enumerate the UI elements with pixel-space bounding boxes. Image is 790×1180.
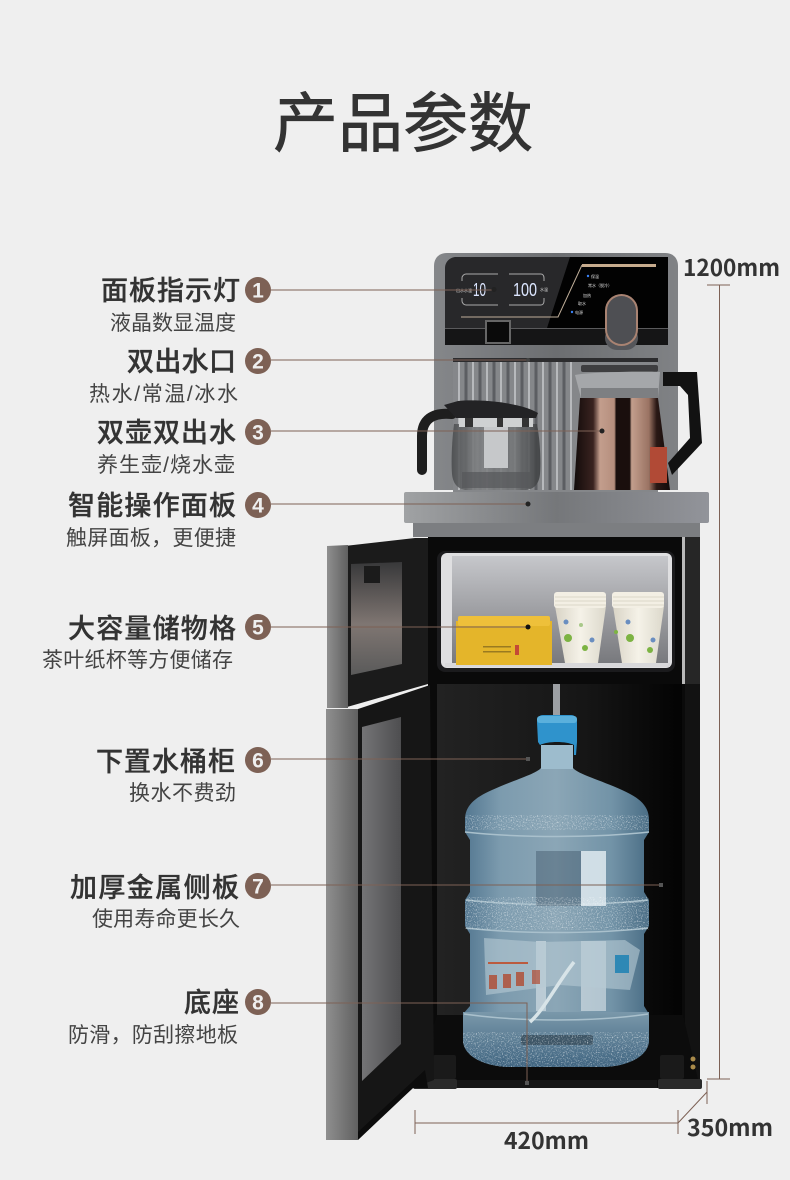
touch labels: 电源 [575,309,583,315]
callout 2 [89,347,271,406]
callout 4: 触屏面板，更便捷 [66,527,236,550]
temperature display left: 出水水温 [456,287,472,293]
temperature display left: 10 [473,280,486,300]
temperature display right [509,274,548,305]
callout 6: 下置水桶柜 [96,747,235,777]
callout lines with dots [271,287,663,1085]
rib recess [453,358,658,492]
yellow tea box [456,616,552,665]
right paper cups [612,592,664,663]
callout 7: 加厚金属侧板 [70,873,239,903]
callout 6: 换水不费劲 [129,782,236,805]
bottle glitter texture [463,800,649,1070]
dimension: depth 350mm [678,1081,773,1143]
callout 3: 3 [252,422,264,444]
storage compartment [437,551,675,672]
water bottle [463,684,649,1070]
callout 4: 4 [252,494,264,518]
callout 7 [70,873,271,931]
callout 4: 智能操作面板 [68,491,236,521]
touch labels: 加热 [583,292,591,298]
temperature display right: 100 [513,280,537,300]
temperature display left [456,274,498,305]
callout 8: 防滑，防刮擦地板 [68,1024,238,1047]
callout 8: 底座 [184,988,239,1018]
countertop [404,492,709,537]
bottle cap [537,715,577,755]
callout 8 [68,988,271,1047]
upper door open [327,538,428,708]
left paper cups [554,592,606,663]
callout 8: 8 [252,992,264,1014]
control panel [445,257,668,350]
callout 5: 大容量储物格 [68,614,236,644]
callout 5: 5 [252,616,264,640]
callout 6: 6 [252,750,264,772]
dimension: width 420mm: 420mm [504,1122,589,1156]
callout 5: 茶叶纸杯等方便储存 [42,649,233,672]
knob button [605,294,638,350]
callout 1 [101,276,271,335]
water nozzle [485,320,511,344]
callout 7: 7 [252,876,264,898]
temperature display right: 水温 [540,286,548,292]
callout 2: 2 [252,350,264,374]
kettle right [574,365,702,490]
callout 1: 液晶数显温度 [110,312,236,335]
callout 3: 养生壶/烧水壶 [97,454,235,477]
callout 2: 热水/常温/冰水 [89,383,238,406]
callout 3: 双壶双出水 [97,418,236,448]
dimension: height 1200mm [683,249,780,1079]
cabinet body [413,536,702,1089]
dimension: height 1200mm: 1200mm [683,249,780,283]
title: 产品参数 [273,71,533,165]
callout 7: 使用寿命更长久 [92,908,240,931]
top head unit [434,253,678,492]
callout 5 [42,614,271,672]
callout 3 [97,418,271,477]
callout 6 [96,747,271,805]
touch labels: 保温 [591,273,599,279]
bottle label [484,938,640,995]
callout 1: 面板指示灯 [101,276,240,306]
dimension: width 420mm [415,1110,678,1156]
touch labels [571,273,612,315]
touch labels: 取水 [578,300,586,306]
callout 2: 双出水口 [127,347,236,377]
lower door open [326,685,434,1140]
kettle left [422,400,540,490]
callout 1: 1 [252,280,264,302]
touch labels: 常水（脱冷） [588,282,612,288]
callout 4 [66,491,271,550]
product: tea bar water dispenser [326,253,709,1140]
dimension: depth 350mm: 350mm [687,1109,773,1143]
